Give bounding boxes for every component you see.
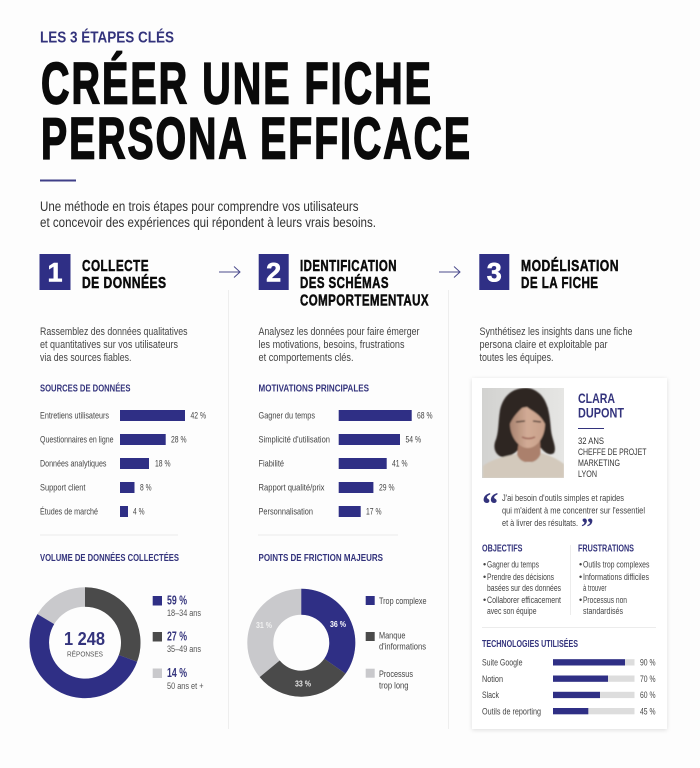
legend: volume: 14 %: [167, 666, 187, 680]
legend: volume: 18–34 ans: [167, 608, 201, 618]
step 3 heading: MODÉLISATION: [521, 256, 619, 275]
step 2 description: et comportements clés.: [258, 352, 354, 364]
step 2 description: [258, 326, 420, 364]
bar chart: technologies: 60 %: [640, 690, 656, 700]
legend: friction: Manque: [379, 630, 406, 642]
legend: volume: 35–49 ans: [167, 644, 201, 654]
bar chart: motivations: 54 %: [406, 434, 421, 444]
bar chart: motivations: Simplicité d'utilisation: [258, 434, 330, 446]
objectifs: [482, 544, 561, 616]
step 3 description: [480, 326, 632, 364]
step 1 heading: DE DONNÉES: [82, 273, 166, 292]
bar chart: sources de données: 42 %: [190, 410, 206, 420]
donut chart: friction: 36 %: [330, 619, 346, 629]
step 2 description: Analysez les données pour faire émerger: [258, 326, 420, 338]
bar chart: motivations: Rapport qualité/prix: [258, 482, 325, 494]
bar chart: technologies: 45 %: [640, 706, 656, 716]
frustrations: Informations difficiles: [583, 572, 649, 582]
bar chart: technologies: 90 %: [640, 658, 656, 668]
step 3 heading: [521, 256, 619, 292]
bar chart: technologies: Outils de reporting: [482, 706, 541, 717]
legend: friction: [366, 596, 426, 692]
panel: step 3 modélisation: [472, 254, 667, 730]
bar chart: motivations: Gagner du temps: [258, 410, 315, 422]
objectifs: basées sur des données: [487, 583, 561, 593]
title: [41, 52, 472, 172]
objectifs: •: [483, 595, 486, 605]
persona details: [578, 436, 647, 479]
bar chart: sources de données: 4 %: [133, 506, 144, 516]
frustrations: à trouver: [583, 583, 606, 593]
persona name: [578, 390, 624, 421]
bar chart: technologies: Notion: [482, 674, 503, 685]
intro text: Une méthode en trois étapes pour comprendre vos utilisateurs: [40, 199, 359, 214]
donut centre label: RÉPONSES: [67, 650, 103, 659]
legend: volume: 27 %: [167, 630, 187, 644]
intro text: [40, 199, 376, 230]
donut chart: friction: 33 %: [295, 678, 311, 688]
persona details: LYON: [578, 469, 597, 479]
step 2 badge: 2: [266, 258, 281, 288]
intro text: et concevoir des expériences qui répondent à leurs vrais besoins.: [40, 215, 376, 230]
bar chart: sources de données: Études de marché: [40, 506, 98, 518]
heading: points de friction: POINTS DE FRICTION MAJEURS: [258, 553, 383, 564]
quote: J'ai besoin d'outils simples et rapides: [502, 493, 624, 503]
bar chart: motivations: 17 %: [366, 506, 382, 516]
objectifs: •: [483, 572, 486, 582]
bar chart: sources de données: Données analytiques: [40, 458, 107, 470]
frustrations: Outils trop complexes: [583, 559, 650, 569]
legend: volume: [153, 594, 204, 691]
objectifs: Prendre des décisions: [487, 572, 554, 582]
persona card: [472, 378, 667, 730]
heading: motivations principales: MOTIVATIONS PRINCIPALES: [258, 384, 369, 394]
bar chart: sources de données: Questionnaires en ligne: [40, 434, 114, 446]
bar chart: sources de données: [40, 410, 206, 518]
bar chart: motivations: Fiabilité: [258, 458, 284, 470]
title rule: [40, 180, 76, 182]
portrait photo: [482, 388, 564, 478]
step 1 heading: [82, 258, 166, 292]
donut centre value: 1 248: [64, 628, 105, 649]
step 3 description: persona claire et exploitable par: [480, 339, 608, 351]
icon: opening quote: “: [482, 487, 498, 523]
bar chart: motivations: [258, 410, 432, 518]
frustrations: •: [579, 572, 582, 582]
step 3 description: Synthétisez les insights dans une fiche: [480, 326, 632, 338]
objectifs: Collaborer efficacement: [487, 595, 561, 605]
step 1 badge: 1: [47, 258, 63, 288]
quote: et à livrer des résultats.: [502, 518, 578, 528]
step 3 heading: DE LA FICHE: [521, 275, 598, 292]
step 1 badge: [40, 254, 70, 290]
step 2 heading: [300, 258, 429, 310]
donut chart: friction: [256, 602, 346, 688]
step 2 badge: [259, 254, 289, 290]
heading: sources de données: SOURCES DE DONNÉES: [40, 382, 131, 394]
frustrations: Processus non: [583, 595, 627, 605]
legend: volume: 59 %: [167, 594, 187, 608]
quote: [482, 487, 645, 541]
bar chart: technologies: 70 %: [640, 674, 656, 684]
step 2 description: les motivations, besoins, frustrations: [258, 339, 405, 351]
bar chart: sources de données: Entretiens utilisateurs: [40, 410, 109, 422]
bar chart: technologies: [482, 658, 656, 717]
title: CRÉER UNE FICHE: [41, 52, 433, 116]
bar chart: technologies: Slack: [482, 690, 499, 701]
step 2 heading: IDENTIFICATION: [300, 258, 397, 275]
bar chart: motivations: Personnalisation: [258, 506, 313, 518]
step 1 description: et quantitatives sur vos utilisateurs: [40, 339, 178, 351]
heading: volume de données: VOLUME DE DONNÉES COLLECTÉES: [40, 551, 179, 564]
eyebrow: LES 3 ÉTAPES CLÉS: [40, 30, 174, 46]
legend: volume: 50 ans et +: [167, 681, 204, 691]
panel: step 2 identification: [256, 254, 432, 692]
bar chart: motivations: 29 %: [379, 482, 394, 492]
step 3 badge: [479, 254, 509, 290]
step 2 heading: DES SCHÉMAS: [300, 273, 389, 292]
quote: qui m'aident à me concentrer sur l'essentiel: [502, 506, 645, 516]
objectifs: avec son équipe: [487, 606, 536, 616]
heading: technologies utilisées: TECHNOLOGIES UTILISÉES: [482, 637, 578, 650]
bar chart: sources de données: 8 %: [140, 482, 152, 492]
objectifs: •: [483, 559, 486, 569]
step 1 description: [40, 326, 188, 364]
legend: friction: Trop complexe: [379, 596, 426, 607]
persona name: DUPONT: [578, 405, 624, 421]
step 1 description: Rassemblez des données qualitatives: [40, 326, 188, 338]
step 3 description: toutes les équipes.: [480, 352, 554, 364]
bar chart: sources de données: 18 %: [155, 458, 170, 468]
persona name: CLARA: [578, 390, 615, 406]
bar chart: motivations: 68 %: [417, 410, 432, 420]
legend: friction: Processus: [379, 669, 413, 680]
frustrations: [578, 544, 650, 616]
icon: closing quote: ”: [581, 514, 594, 541]
objectifs: OBJECTIFS: [482, 544, 523, 555]
panel: step 1 collecte: [39, 254, 206, 691]
step 1 heading: COLLECTE: [82, 258, 149, 275]
bar chart: technologies: Suite Google: [482, 658, 522, 668]
frustrations: •: [579, 559, 582, 569]
donut chart: friction: 31 %: [256, 620, 272, 630]
arrow: step 1 to 2: [219, 266, 240, 278]
step 3 badge: 3: [487, 258, 502, 288]
donut chart: volume: [39, 597, 131, 688]
persona details: 32 ANS: [578, 436, 604, 446]
step 2 heading: COMPORTEMENTAUX: [300, 292, 429, 310]
persona details: MARKETING: [578, 458, 620, 468]
legend: friction: d'informations: [379, 642, 426, 652]
bar chart: motivations: 41 %: [392, 458, 408, 468]
arrow: step 2 to 3: [439, 266, 460, 278]
frustrations: standardisés: [583, 606, 623, 616]
bar chart: sources de données: 28 %: [171, 434, 186, 444]
persona details: CHEFFE DE PROJET: [578, 447, 647, 457]
column separators: [228, 290, 449, 729]
objectifs: Gagner du temps: [487, 559, 539, 569]
bar chart: sources de données: Support client: [40, 482, 86, 494]
title: PERSONA EFFICACE: [41, 106, 472, 172]
frustrations: FRUSTRATIONS: [578, 544, 634, 555]
legend: friction: trop long: [379, 680, 408, 692]
step 1 description: via des sources fiables.: [40, 352, 132, 364]
frustrations: •: [579, 595, 582, 605]
